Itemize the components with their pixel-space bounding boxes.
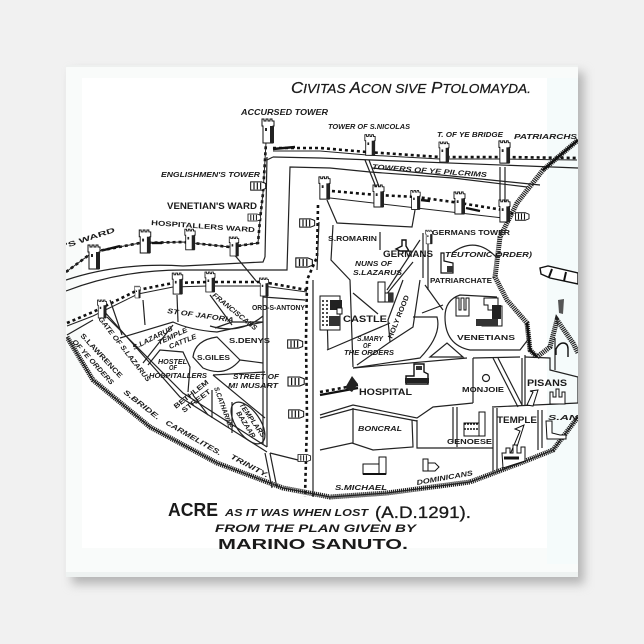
label: St Denys: S.DENYS bbox=[229, 338, 270, 345]
label: ward at left: 'S WARD bbox=[64, 227, 116, 250]
label: St Mary: S.MARY bbox=[357, 336, 384, 343]
label: towers of pilgrims: TOWERS OF YE PILCRIMS bbox=[372, 164, 487, 179]
ceramic tile bbox=[66, 65, 578, 577]
label: hospitallers ward: HOSPITALLERS WARD bbox=[151, 220, 255, 234]
icon: venetian buildings bbox=[456, 298, 502, 326]
icon: castle keep bbox=[320, 296, 342, 330]
label: castle: CASTLE bbox=[343, 314, 387, 324]
label: street of Jaforia: ST OF JAFORIA bbox=[167, 308, 234, 324]
label: accursed tower: ACCURSED TOWER bbox=[240, 108, 328, 117]
label: Bethlem street: STREET bbox=[181, 388, 213, 415]
icon: Temple fortress bbox=[502, 425, 525, 468]
label: patriarchs: PATRIARCHS bbox=[514, 134, 577, 141]
label: nuns of St Lazarus: NUNS OF bbox=[355, 261, 393, 268]
label: venetians: VENETIANS bbox=[457, 335, 515, 342]
icon: hospital ward wall bbox=[345, 376, 358, 392]
title: CIVITAS ACON SIVE PTOLOMAYDA. bbox=[291, 80, 531, 97]
label: englishmen's tower: ENGLISHMEN'S TOWER bbox=[161, 172, 260, 179]
label: monjoie: MONJOIE bbox=[462, 387, 504, 394]
label: holy rood: HOLY ROOD bbox=[387, 294, 411, 340]
icon: Dominican church bbox=[423, 459, 439, 471]
outer city walls bbox=[66, 144, 578, 273]
label: Bethlem: BETHLEM bbox=[173, 379, 210, 411]
caption: as it was when lost: AS IT WAS WHEN LOST bbox=[224, 508, 369, 519]
icon: harbour tower of flies bbox=[540, 266, 578, 284]
label: venetian's ward: VENETIAN'S WARD bbox=[167, 201, 258, 211]
label: temple quarter: TEMPLE bbox=[157, 327, 189, 347]
label: teutonic order: TEUTONIC ORDER) bbox=[445, 252, 533, 259]
label: St Giles: S.GILES bbox=[197, 355, 230, 362]
label: boncral: BONCRAL bbox=[358, 426, 402, 433]
label: temple: TEMPLE bbox=[497, 415, 537, 425]
icon: St Michael church bbox=[363, 457, 386, 474]
label: dominicans: DOMINICANS bbox=[416, 470, 474, 487]
label: bridge tower: T. OF YE BRIDGE bbox=[437, 132, 503, 139]
map bbox=[64, 108, 580, 497]
icon: Pisan buildings bbox=[527, 389, 565, 406]
icon: Monjoie well bbox=[482, 374, 490, 382]
caption: Acre: ACRE bbox=[168, 500, 218, 520]
label: tower of St Nicolas: TOWER OF S.NICOLAS bbox=[328, 124, 410, 131]
label: St Lawrence: S.LAWRENCE bbox=[79, 333, 123, 380]
label: St Catharine: S.CATHARINE bbox=[212, 386, 234, 429]
icon: Genoese church bbox=[464, 412, 485, 436]
label: nuns of St Lazarus second line: S.LAZARUS bbox=[353, 270, 402, 277]
label: of the orders: OF YE ORDERS bbox=[71, 339, 115, 387]
eastern quarter streets bbox=[492, 338, 578, 473]
label: St Andrew: S.AN bbox=[548, 415, 580, 422]
caption line three: MARINO SANUTO. bbox=[218, 536, 408, 553]
label: franciscans: FRANCISCANS bbox=[211, 292, 258, 332]
label: hostel: HOSTEL bbox=[158, 359, 187, 366]
label: hospitallers hostel: HOSPITALLERS bbox=[149, 373, 207, 380]
tile shadow bbox=[72, 72, 584, 584]
western quarter streets bbox=[67, 293, 305, 488]
caption line one bbox=[168, 500, 471, 522]
label: Germans tower: GERMANS TOWER bbox=[432, 230, 510, 237]
icon: church of St Lazarus bbox=[378, 282, 393, 302]
label: hospital: HOSPITAL bbox=[359, 387, 413, 397]
moat bbox=[66, 160, 540, 291]
icon: harbour building bbox=[556, 343, 568, 357]
label: trinity: TRINITY. bbox=[229, 454, 269, 480]
caption: date: (A.D.1291). bbox=[375, 503, 471, 522]
central and upper streets bbox=[320, 200, 530, 450]
label: order of St Anthony: ORD-S-ANTONY bbox=[252, 305, 305, 312]
label: genoese: GENOESE bbox=[447, 439, 492, 446]
label: St Michael: S.MICHAEL bbox=[335, 485, 387, 492]
label: street of: STREET OF bbox=[233, 374, 280, 381]
icon: small chapel on the water bbox=[558, 299, 564, 314]
label: Mt Musart: M! MUSART bbox=[228, 383, 279, 390]
label: templars: TEMPLARS bbox=[237, 402, 266, 439]
label: Germans: GERMANS bbox=[383, 249, 433, 259]
caption line two: FROM THE PLAN GIVEN BY bbox=[215, 523, 418, 535]
icon: St Andrew church bbox=[546, 421, 566, 439]
label: cattle market: CATTLE bbox=[168, 333, 198, 351]
icon: German church and patriarchate bbox=[396, 240, 453, 273]
map labels bbox=[64, 108, 580, 492]
label: St Bride: S.BRIDE. bbox=[122, 389, 161, 422]
label: of: OF bbox=[363, 343, 372, 350]
label: pisans: PISANS bbox=[527, 378, 567, 388]
label: carmelites: CARMELITES. bbox=[164, 420, 222, 457]
label: St Lazarus street: S.LAZARUS bbox=[132, 325, 174, 352]
label: St Romarin: S.ROMARIN bbox=[328, 236, 377, 243]
label: bazaar: BAZAAR bbox=[234, 410, 256, 440]
inner walls bbox=[67, 190, 517, 497]
label: patriarchate: PATRIARCHATE bbox=[430, 278, 492, 285]
icon: hospital building bbox=[405, 364, 429, 384]
flanking gate towers bbox=[248, 182, 529, 462]
sea coast bbox=[67, 140, 578, 497]
label: gate of St Lazarus: GATE OF S.LAZARUS bbox=[96, 316, 151, 384]
label: the orders: THE ORDERS bbox=[344, 350, 394, 357]
label: hostel of: OF bbox=[169, 365, 178, 372]
towers on walls bbox=[88, 119, 510, 318]
